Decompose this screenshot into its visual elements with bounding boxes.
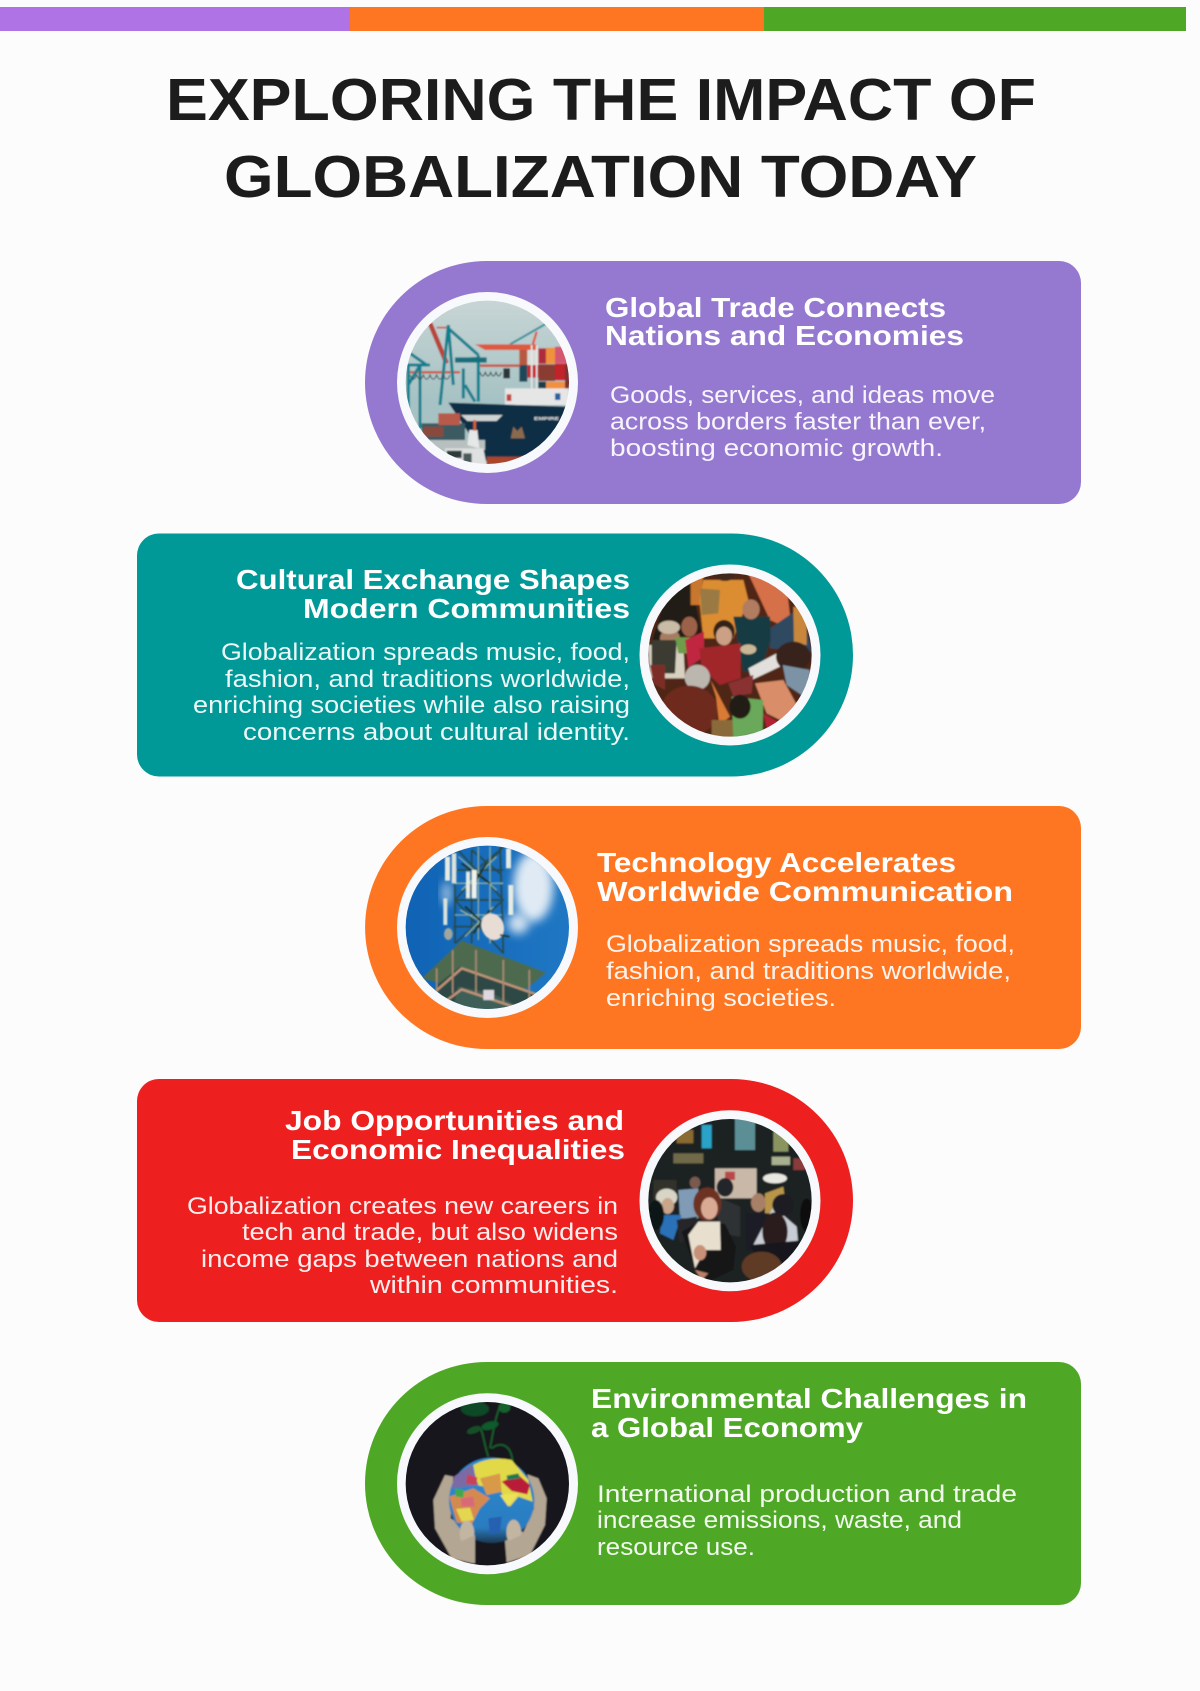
body text <box>187 1193 618 1299</box>
title: GLOBALIZATION TODAY <box>224 144 977 210</box>
photo ring <box>397 1393 578 1574</box>
photo ring <box>397 837 578 1018</box>
heading <box>591 1383 1027 1443</box>
body text: tech and trade, but also widens <box>242 1219 618 1246</box>
body text: income gaps between nations and <box>201 1246 618 1273</box>
body text: within communities. <box>369 1272 618 1299</box>
heading: Cultural Exchange Shapes <box>236 564 630 595</box>
photo: woman in a street crowd <box>647 1117 813 1287</box>
top colour bar <box>0 7 1186 31</box>
heading <box>285 1105 625 1165</box>
body text: Goods, services, and ideas move <box>610 382 995 409</box>
card background: orange <box>365 806 1081 1049</box>
photo: telecom tower <box>403 843 573 1013</box>
heading <box>605 292 964 351</box>
heading <box>236 564 630 624</box>
panel: jobs <box>137 1079 853 1322</box>
photo: container ship at port: EMPIRE <box>534 416 560 422</box>
body text: concerns about cultural identity. <box>243 719 630 746</box>
body text <box>193 639 630 746</box>
photo ring <box>640 1110 820 1291</box>
body text: enriching societies while also raising <box>193 692 630 719</box>
heading: Modern Communities <box>303 593 630 624</box>
body text: resource use. <box>597 1534 755 1561</box>
heading: Worldwide Communication <box>597 876 1013 907</box>
card background: green <box>365 1362 1081 1605</box>
photo: hands holding a globe with seedling <box>403 1398 573 1568</box>
heading: Nations and Economies <box>605 320 964 351</box>
heading: Global Trade Connects <box>605 292 946 323</box>
photo: crowd at a ceremony <box>647 569 813 740</box>
body text: boosting economic growth. <box>610 435 943 462</box>
body text: across borders faster than ever, <box>610 408 986 436</box>
body text <box>610 382 995 462</box>
heading: Environmental Challenges in <box>591 1383 1027 1414</box>
body text: fashion, and traditions worldwide, <box>606 958 1011 985</box>
heading: a Global Economy <box>591 1412 863 1443</box>
body text: Globalization spreads music, food, <box>221 639 630 666</box>
panel: global trade <box>365 261 1081 504</box>
body text: Globalization spreads music, food, <box>606 931 1015 958</box>
heading: Economic Inequalities <box>291 1134 625 1165</box>
body text: Globalization creates new careers in <box>187 1193 618 1220</box>
card background: purple <box>365 261 1081 504</box>
panel: environment <box>365 1362 1081 1605</box>
card background: teal <box>137 534 853 776</box>
body text <box>597 1481 1017 1561</box>
photo: container ship at port <box>403 298 573 468</box>
body text: increase emissions, waste, and <box>597 1507 962 1534</box>
photo ring <box>640 564 820 746</box>
panel: cultural exchange <box>137 534 853 776</box>
card background: red <box>137 1079 853 1322</box>
heading <box>597 847 1013 907</box>
body text: fashion, and traditions worldwide, <box>225 666 630 693</box>
title <box>166 67 1036 210</box>
body text: enriching societies. <box>606 985 836 1012</box>
body text <box>606 931 1015 1012</box>
heading: Technology Accelerates <box>597 847 956 878</box>
photo ring <box>397 292 578 473</box>
body text: International production and trade <box>597 1481 1017 1508</box>
heading: Job Opportunities and <box>285 1105 624 1136</box>
title: EXPLORING THE IMPACT OF <box>166 67 1036 133</box>
panel: technology <box>365 806 1081 1049</box>
